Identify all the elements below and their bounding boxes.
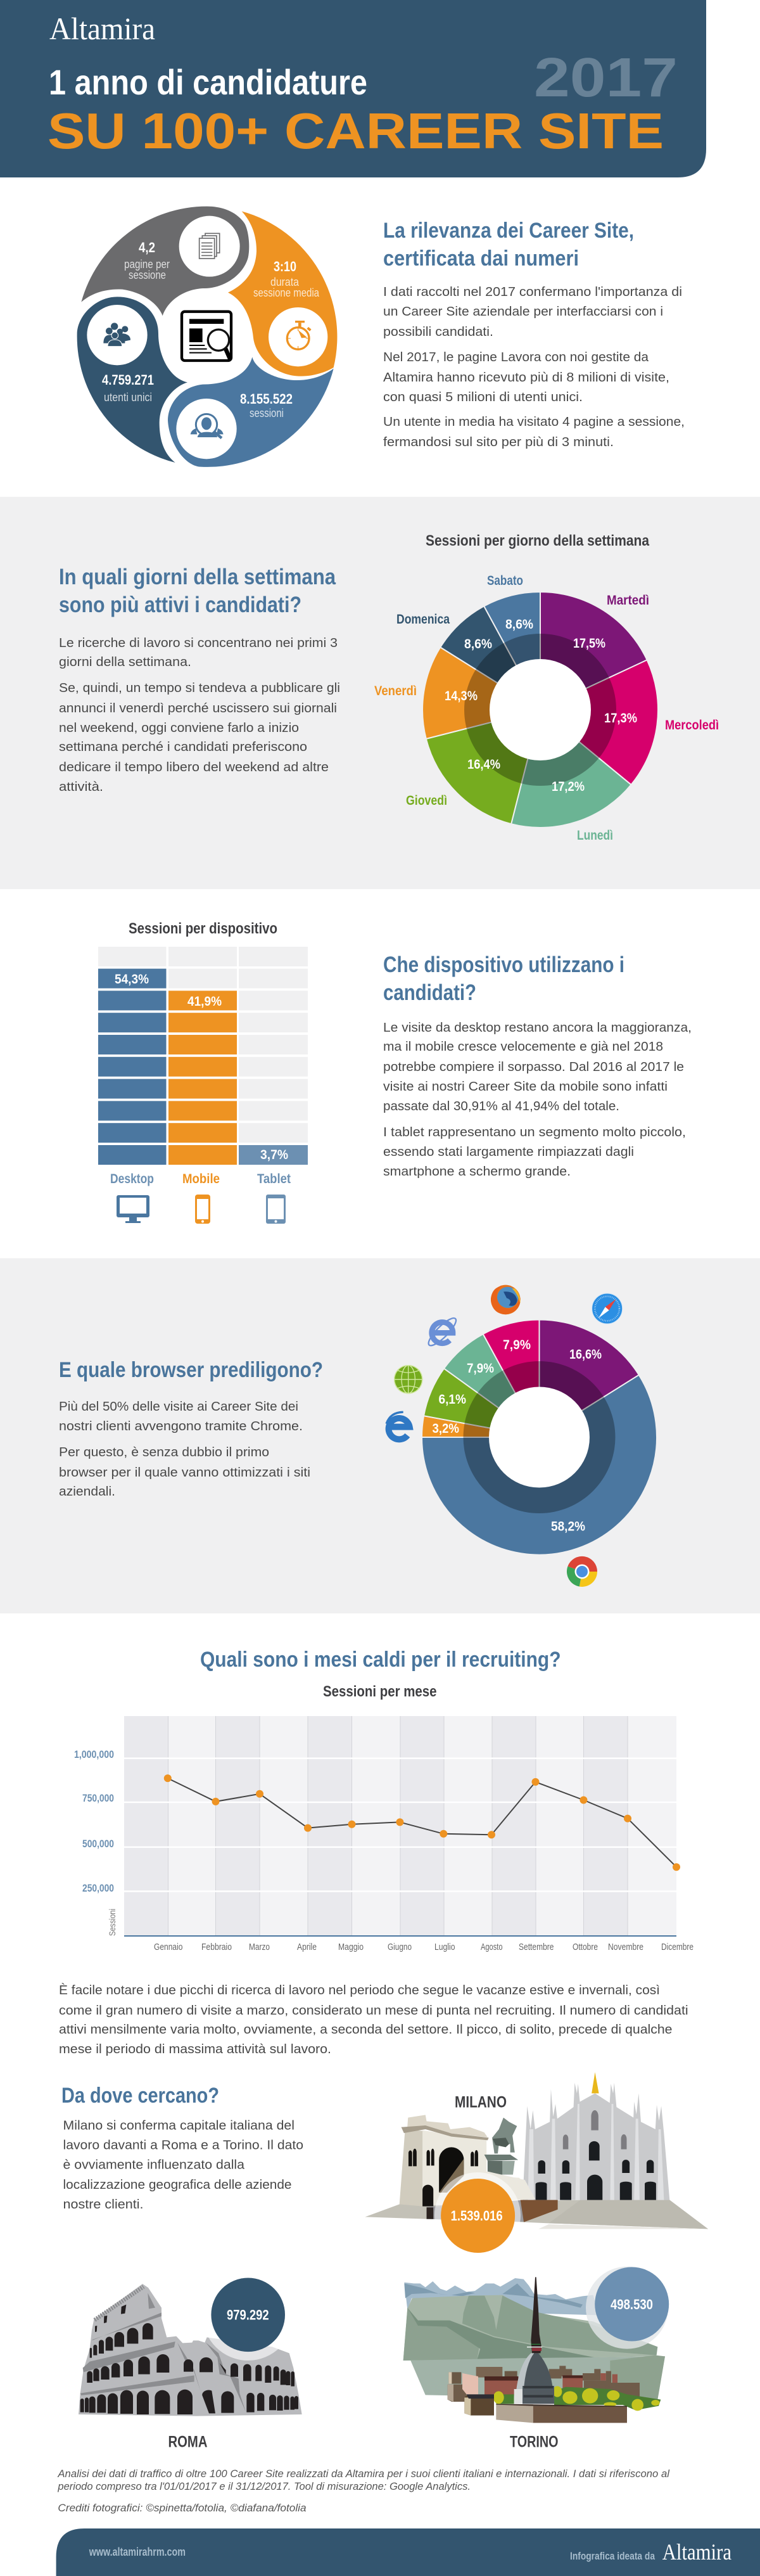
text: pages per session: 4,2 — [139, 240, 155, 255]
body copy: I tablet rappresentano un segmento molto piccolo, — [383, 1125, 686, 1139]
bubble: Roma value: 979.292 — [227, 2307, 269, 2323]
body copy — [59, 636, 340, 794]
icon: tablet — [266, 1195, 286, 1224]
illustration: Torino — [403, 2267, 668, 2423]
device labels: Mobile — [182, 1172, 220, 1186]
icon: edge — [386, 1412, 410, 1439]
text: session duration: durata — [270, 276, 300, 288]
halo: Milano — [434, 2172, 521, 2259]
donut chart: browsers — [422, 1319, 657, 1555]
trees — [493, 2386, 661, 2411]
arch — [400, 2115, 535, 2207]
halo — [586, 2267, 668, 2349]
y axis labels: 250,000 — [82, 1882, 114, 1894]
weekday labels: Giovedì — [406, 793, 447, 808]
icon: chrome — [567, 1556, 597, 1587]
heading: candidati? — [383, 980, 476, 1005]
body copy: I dati raccolti nel 2017 confermano l'importanza di — [383, 285, 682, 299]
arched openings — [80, 2323, 298, 2414]
body copy: Un utente in media ha visitato 4 pagine a sessione, — [383, 415, 685, 429]
text: unique users: 4.759.271 — [102, 372, 154, 388]
body copy: Più del 50% delle visite ai Career Site dei — [59, 1400, 298, 1414]
weekday values: 8,6% — [505, 617, 533, 632]
logo: Altamira: Altamira — [49, 11, 155, 46]
text block: career site relevance — [383, 219, 685, 449]
buildings — [448, 2366, 640, 2402]
weekday values — [445, 617, 637, 794]
weekday labels — [374, 574, 719, 843]
body copy: nostri clienti avvengono tramite Chrome. — [59, 1419, 303, 1433]
segment: orange duration — [228, 211, 337, 376]
body copy: possibili candidati. — [383, 325, 493, 339]
text: session duration: 3:10 — [274, 259, 296, 274]
weekday labels: Mercoledì — [665, 718, 719, 733]
x axis labels: Agosto — [481, 1942, 503, 1952]
y axis title: Sessioni — [107, 1909, 117, 1936]
bubble: Milano value — [441, 2179, 515, 2253]
weekday values: 14,3% — [445, 689, 478, 703]
text: pages per session — [124, 240, 170, 281]
body copy: Milano si conferma capitale italiana del — [63, 2119, 294, 2133]
body copy: aziendali. — [59, 1485, 115, 1499]
mountains — [404, 2278, 598, 2315]
body copy: browser per il quale vanno ottimizzati i siti — [59, 1466, 310, 1480]
heading — [383, 952, 624, 1005]
weekday values: 17,2% — [552, 779, 585, 794]
heading: sono più attivi i candidati? — [59, 593, 301, 617]
x axis labels: Ottobre — [573, 1942, 598, 1952]
bubble: Torino value: 498.530 — [611, 2297, 653, 2312]
y axis labels — [74, 1748, 114, 1894]
illustration: Milano — [365, 2072, 708, 2229]
weekday values: 17,3% — [604, 711, 637, 726]
heading: La rilevanza dei Career Site, — [383, 219, 634, 243]
heading: E quale browser prediligono? — [59, 1358, 323, 1382]
heading: Da dove cercano? — [61, 2084, 219, 2108]
device labels: Tablet — [257, 1172, 291, 1186]
weekday values: 8,6% — [464, 637, 492, 651]
foreground buildings — [464, 2394, 627, 2423]
body copy: giorni della settimana. — [59, 655, 191, 669]
browser values: 58,2% — [551, 1520, 585, 1534]
chart title: Sessioni per dispositivo — [129, 920, 277, 937]
city label: Roma: ROMA — [168, 2433, 208, 2451]
website: www.altamirahrm.com — [89, 2546, 186, 2558]
icon: desktop — [117, 1195, 149, 1223]
Mole Antonelliana — [514, 2277, 554, 2404]
x axis labels: Maggio — [338, 1942, 364, 1952]
icon: mobile — [195, 1195, 210, 1224]
device values: 54,3% — [115, 972, 149, 987]
body copy: Nel 2017, le pagine Lavora con noi gestite da — [383, 350, 649, 364]
weekday values: 17,5% — [573, 636, 605, 651]
device values: 41,9% — [187, 994, 222, 1009]
icon: safari — [592, 1293, 623, 1324]
panel: key numbers wheel — [77, 207, 337, 467]
weekday labels: Sabato — [487, 574, 523, 588]
segment: dark blue users — [77, 297, 187, 463]
duomo — [522, 2072, 669, 2200]
x axis labels: Dicembre — [661, 1942, 694, 1952]
body copy: dedicare il tempo libero del weekend ad altre — [59, 760, 329, 774]
chart title: Sessioni per giorno della settimana — [426, 532, 650, 549]
weekday labels: Venerdì — [374, 684, 417, 698]
text: sessions: 8.155.522 — [240, 391, 293, 407]
body copy — [59, 1400, 310, 1499]
body copy: visite ai nostri Career Site da mobile sono infatti — [383, 1080, 668, 1094]
body copy: un Career Site aziendale per interfacciarsi con i — [383, 305, 663, 319]
x axis labels: Settembre — [519, 1942, 554, 1952]
x axis labels: Luglio — [434, 1942, 455, 1952]
panel: devices — [98, 920, 692, 1224]
browser values: 16,6% — [569, 1347, 602, 1362]
footer background — [56, 2528, 760, 2576]
panel: monthly sessions — [59, 1648, 694, 2056]
x axis labels: Novembre — [608, 1942, 643, 1952]
y axis labels: 1,000,000 — [74, 1748, 114, 1760]
browser values: 6,1% — [438, 1392, 466, 1407]
panel: locations — [61, 2072, 708, 2451]
icon: person search — [191, 414, 224, 438]
icon: pages — [200, 233, 220, 259]
bubble: Roma value — [211, 2278, 285, 2352]
steps and platform — [427, 2172, 558, 2222]
text: session duration: sessione media — [253, 286, 320, 299]
text: sessions: sessioni — [250, 407, 284, 420]
body copy: settimana perché i candidati preferiscono — [59, 740, 307, 754]
panel: browsers — [0, 1259, 760, 1613]
footnotes — [57, 2468, 670, 2514]
footer banner — [56, 2528, 760, 2576]
donut chart: weekdays — [422, 592, 658, 828]
segment: gray pages — [81, 207, 249, 316]
header banner — [0, 0, 706, 177]
text: pages per session: sessione — [129, 269, 166, 281]
icon: people group — [103, 323, 130, 347]
body copy: ma il mobile cresce velocemente e già nel 2018 — [383, 1040, 663, 1054]
panel background — [0, 497, 760, 889]
wheel shapes — [77, 207, 337, 467]
statue — [484, 2118, 518, 2175]
body copy: Le visite da desktop restano ancora la maggioranza, — [383, 1021, 692, 1035]
colosseum body — [79, 2284, 302, 2416]
body copy: Altamira hanno ricevuto più di 8 milioni di visite, — [383, 371, 669, 385]
waffle bar chart — [98, 947, 308, 1165]
body copy: mese il periodo di massima attività sul lavoro. — [59, 2042, 331, 2056]
title line 2: SU 100+ CAREER SITE — [48, 103, 664, 159]
body copy: Per questo, è senza dubbio il primo — [59, 1445, 269, 1459]
icon: page with magnifier — [182, 312, 231, 361]
body copy — [383, 285, 685, 449]
x axis labels: Aprile — [297, 1942, 317, 1952]
line chart — [124, 1716, 680, 1936]
bubble: Torino value — [595, 2267, 669, 2341]
chart title: Sessioni per mese — [323, 1683, 437, 1700]
footnotes: Crediti fotografici: ©spinetta/fotolia, ©diafana/fotolia — [58, 2502, 307, 2514]
icon: globe — [394, 1365, 422, 1394]
weekday labels: Martedì — [607, 593, 649, 608]
text: session duration — [253, 259, 320, 299]
weekday labels: Domenica — [396, 612, 450, 627]
device labels — [110, 1172, 291, 1186]
text: sessions — [240, 391, 293, 420]
body copy: passate dal 30,91% al 41,94% del totale. — [383, 1099, 619, 1113]
text: unique users: utenti unici — [104, 391, 152, 404]
illustration: Roma — [79, 2270, 302, 2416]
browser values: 3,2% — [432, 1421, 459, 1436]
title line 1: 1 anno di candidature — [49, 62, 367, 102]
browser icons — [386, 1285, 623, 1439]
body copy: nostre clienti. — [63, 2198, 143, 2212]
city label: Milano: MILANO — [455, 2094, 507, 2111]
panel background — [0, 1259, 760, 1613]
x axis labels — [154, 1942, 694, 1952]
segment: light blue sessions — [168, 357, 334, 467]
browser values: 7,9% — [467, 1361, 494, 1376]
text: pages per session: pagine per — [124, 258, 170, 271]
credit: Infografica ideata da — [570, 2550, 655, 2562]
small windows — [95, 2305, 126, 2332]
device values: 3,7% — [260, 1148, 288, 1162]
device values — [115, 972, 288, 1162]
body copy: smartphone a schermo grande. — [383, 1165, 571, 1179]
body copy: attività. — [59, 780, 103, 794]
body copy: con quasi 5 milioni di utenti unici. — [383, 390, 583, 404]
ground — [365, 2200, 708, 2229]
y axis labels: 500,000 — [82, 1838, 114, 1850]
body copy: come il gran numero di visite a marzo, considerato un mese di punta nel recruiting. Il numero di candidati — [59, 2004, 688, 2018]
browser values: 7,9% — [503, 1338, 531, 1352]
weekday labels: Lunedì — [577, 828, 613, 843]
footer logo: Altamira — [662, 2539, 732, 2565]
heading: Che dispositivo utilizzano i — [383, 952, 624, 977]
text: unique users — [102, 372, 154, 404]
body copy: Se, quindi, un tempo si tendeva a pubblicare gli — [59, 681, 340, 695]
body copy: attivi mensilmente varia molto, ovviamente, a seconda del settore. Il picco, di solito, precede di qualche — [59, 2023, 673, 2037]
footnotes: periodo compreso tra l'01/01/2017 e il 31/12/2017. Tool di misurazione: Google Analytics. — [57, 2480, 471, 2492]
y axis labels: 750,000 — [82, 1792, 114, 1804]
body copy — [59, 1983, 688, 2056]
white discs — [87, 216, 327, 459]
year: 2017 — [534, 47, 678, 108]
body copy: fermandosi sul sito per più di 3 minuti. — [383, 435, 614, 449]
body copy: nel weekend, oggi conviene farlo a inizio — [59, 721, 299, 735]
body copy: localizzazione geografica delle aziende — [63, 2178, 291, 2192]
browser values — [432, 1338, 602, 1534]
device labels: Desktop — [110, 1172, 154, 1186]
body copy — [383, 1021, 692, 1179]
x axis labels: Marzo — [249, 1942, 270, 1952]
icon: stopwatch — [287, 321, 312, 349]
hills — [403, 2295, 665, 2400]
heading: Quali sono i mesi caldi per il recruiting? — [200, 1648, 561, 1672]
body copy — [63, 2119, 303, 2212]
heading: In quali giorni della settimana — [59, 565, 336, 589]
weekday values: 16,4% — [467, 757, 500, 772]
icon: firefox — [491, 1285, 521, 1314]
x axis labels: Gennaio — [154, 1942, 182, 1952]
body copy: È facile notare i due picchi di ricerca di lavoro nel periodo che segue le vacanze estive e invernali, così — [59, 1983, 660, 1997]
panel: weekday sessions — [0, 497, 760, 889]
heading — [59, 565, 336, 617]
x axis labels: Febbraio — [201, 1942, 232, 1952]
x axis labels: Giugno — [388, 1942, 412, 1952]
heading: certificata dai numeri — [383, 247, 579, 271]
heading — [383, 219, 634, 271]
city label: Torino: TORINO — [510, 2433, 559, 2451]
banner background — [0, 0, 706, 177]
footnotes: Analisi dei dati di traffico di oltre 100 Career Site realizzati da Altamira per i suoi clienti italiani e internazionali. I dati si riferiscono al — [57, 2468, 670, 2480]
body copy: potrebbe compiere il sorpasso. Dal 2016 al 2017 le — [383, 1060, 684, 1074]
body copy: Le ricerche di lavoro si concentrano nei primi 3 — [59, 636, 338, 650]
body copy: annunci il venerdì perché uscissero sui giornali — [59, 702, 337, 715]
crown ticks — [94, 2286, 144, 2320]
icon: internet explorer — [425, 1315, 459, 1349]
body copy: è ovviamente influenzato dalla — [63, 2158, 245, 2172]
body copy: essendo stati largamente rimpiazzati dagli — [383, 1145, 634, 1159]
halo — [203, 2270, 293, 2361]
body copy: lavoro davanti a Roma e a Torino. Il dato — [63, 2138, 303, 2152]
bubble: Milano value: 1.539.016 — [451, 2208, 503, 2224]
ledges — [80, 2293, 246, 2413]
